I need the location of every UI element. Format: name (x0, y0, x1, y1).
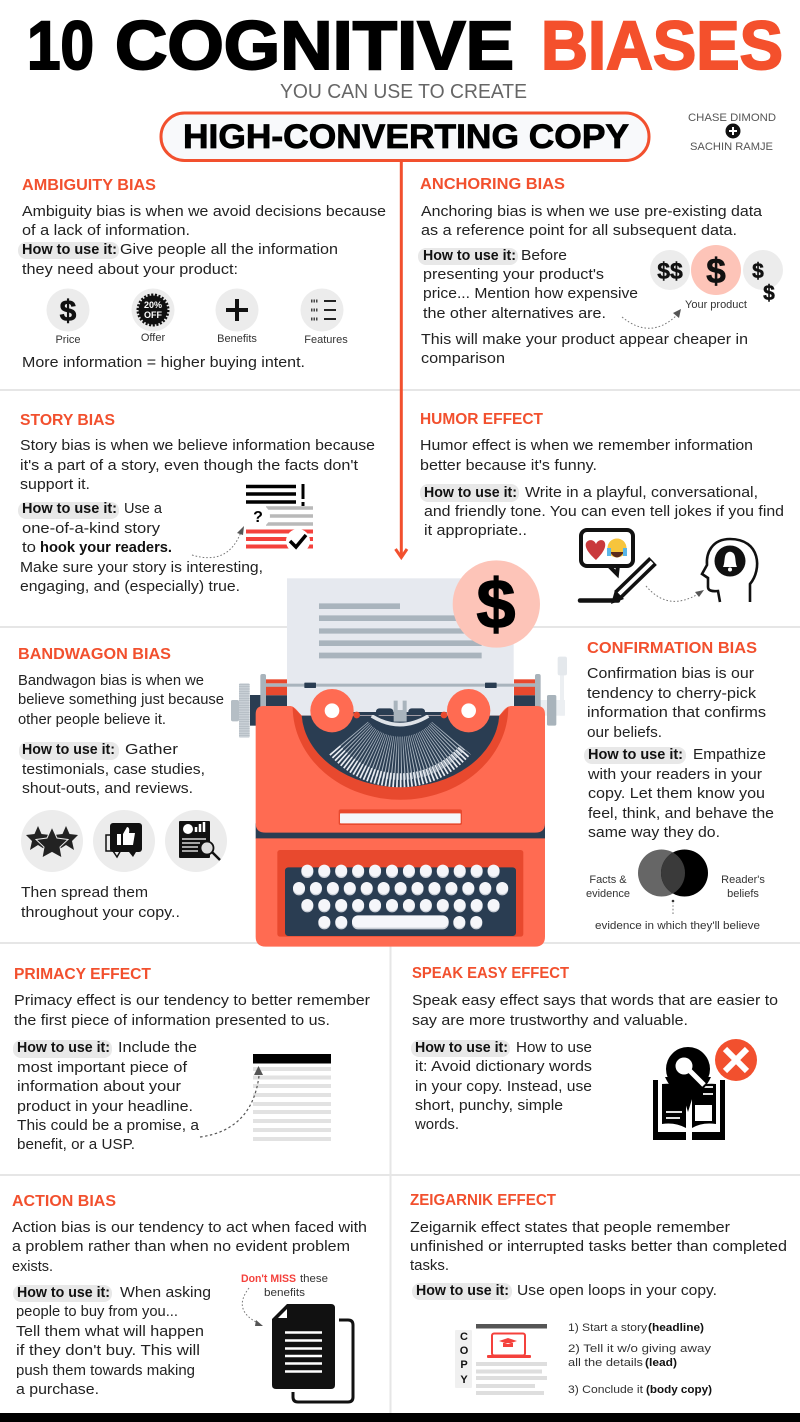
heading: action bias: ACTION BIAS (12, 1193, 116, 1210)
text: how to use action (13, 1285, 211, 1398)
panel: speak easy effect (411, 965, 778, 1140)
keyboard keys (299, 871, 502, 929)
icon: benefits (216, 288, 258, 345)
icon: offer (132, 288, 174, 344)
text: action definition: Action bias is our tendency to act when faced with (12, 1220, 367, 1236)
text: confirmation definition: Confirmation bias is our (587, 666, 754, 682)
text: story definition: it's a part of a story, even though the facts don't (20, 458, 358, 474)
text: how to use anchoring (418, 248, 638, 322)
text: how to use anchoring: the other alternatives are. (423, 306, 606, 322)
heading: bandwagon bias: BANDWAGON BIAS (18, 646, 171, 663)
text: anchoring conclusion: This will make your product appear cheaper in (421, 332, 748, 348)
text: how to use story: hook your readers. (40, 540, 172, 556)
icon: dictionary with magnifier (653, 1046, 725, 1140)
icon: price comparison circles: $$ (657, 258, 683, 284)
icon: price comparison circles: $ (706, 252, 726, 291)
text: how to use zeigarnik: How to use it: (416, 1283, 509, 1299)
text: ambiguity definition: of a lack of information. (22, 223, 190, 239)
text: zeigarnik steps: (headline) (648, 1322, 704, 1334)
text: how to use bandwagon: How to use it: (22, 742, 115, 758)
text: zeigarnik definition: tasks. (410, 1258, 449, 1274)
paper rod (263, 683, 538, 688)
icon: story document (246, 484, 313, 553)
panel: action bias (12, 1193, 367, 1402)
type bars fan (335, 716, 465, 780)
text: don't miss callout (241, 1273, 328, 1299)
dollar circle (453, 560, 540, 648)
text: how to use action: if they don't buy. This will (16, 1343, 200, 1359)
subtitle: YOU CAN USE TO CREATE (280, 80, 527, 103)
text: how to use zeigarnik: Use open loops in your copy. (517, 1283, 717, 1299)
text: zeigarnik steps (568, 1322, 712, 1396)
headline pill: HIGH-CONVERTING COPY (183, 118, 629, 156)
text: how to use ambiguity: How to use it: (22, 242, 117, 258)
text: how to use humor: Write in a playful, conversational, (525, 485, 758, 501)
icon: price comparison circles: Your product (685, 299, 747, 311)
text: how to use story: one-of-a-kind story (22, 521, 161, 537)
text: how to use speak easy: it: Avoid dictionary words (415, 1059, 592, 1075)
icon: stars (21, 810, 83, 872)
text: action definition (12, 1220, 367, 1275)
text: how to use primacy (13, 1040, 200, 1153)
text: primacy definition: the first piece of information presented to us. (14, 1013, 330, 1029)
panel: story bias (18, 412, 375, 595)
text: how to use action: people to buy from you... (16, 1304, 178, 1320)
icon: price: $ (60, 295, 77, 328)
text: anchoring definition (421, 204, 763, 239)
typewriter upper body (256, 706, 545, 833)
text: how to use primacy: product in your headline. (17, 1099, 193, 1115)
text: how to use ambiguity: Give people all the information (120, 242, 338, 258)
heading: primacy effect: PRIMACY EFFECT (14, 966, 151, 983)
text: how to use humor (420, 484, 784, 539)
venn diagram: beliefs (727, 888, 759, 900)
text: how to use story (18, 501, 263, 595)
icon: speech bubble with emoji and pencil (580, 530, 653, 604)
icon: report with magnifier (165, 810, 227, 872)
text: confirmation definition: tendency to cherry-pick (587, 686, 757, 702)
text: how to use action: How to use it: (17, 1285, 110, 1301)
text: primacy definition (14, 993, 370, 1029)
text: bandwagon definition: Bandwagon bias is when we (18, 673, 204, 689)
text: speak easy definition (412, 993, 778, 1029)
text: confirmation definition: our beliefs. (587, 725, 662, 741)
text: bandwagon definition: believe something just because (18, 692, 224, 708)
typebar guide and spools (310, 689, 490, 732)
title: 10 (27, 7, 94, 84)
icon: thumbs up reviews (93, 810, 155, 872)
panel: anchoring bias (418, 176, 783, 367)
text: confirmation definition: information that confirms (587, 705, 766, 721)
text: how to use story: Use a (124, 501, 163, 517)
text: how to use confirmation: same way they do. (588, 825, 720, 841)
text: how to use action: Tell them what will happen (16, 1324, 204, 1340)
icon: copy layout: Y (460, 1374, 468, 1386)
text: how to use zeigarnik (412, 1283, 717, 1300)
text: how to use speak easy: How to use (516, 1040, 592, 1056)
text: how to use story: How to use it: (22, 501, 117, 517)
text: action definition: a problem rather than when no evident problem (12, 1239, 350, 1255)
text: confirmation definition (587, 666, 766, 741)
title: BIASES (541, 7, 783, 84)
text: how to use confirmation: Empathize (693, 747, 766, 763)
text: speak easy definition: Speak easy effect says that words that are easier to (412, 993, 778, 1009)
icon: price (46, 288, 90, 346)
arrow: to documents (242, 1288, 263, 1326)
typewriter base (256, 823, 545, 947)
panel: zeigarnik effect (410, 1192, 787, 1396)
icon: headline document (253, 1054, 331, 1139)
illustration: typewriter (231, 560, 567, 947)
text: action definition: exists. (12, 1259, 53, 1275)
text: how to use speak easy: words. (414, 1117, 459, 1133)
text: how to use anchoring: Before (521, 248, 567, 264)
text: how to use primacy: most important piece of (17, 1060, 188, 1076)
text: ambiguity definition: Ambiguity bias is when we avoid decisions because (22, 204, 386, 220)
text: anchoring conclusion: comparison (421, 351, 505, 367)
typewriter left side (231, 674, 287, 738)
text: how to use speak easy (411, 1040, 592, 1133)
icon: offer: Offer (141, 332, 165, 344)
text: how to use confirmation: copy. Let them know you (588, 786, 765, 802)
arrow: to your product (622, 309, 681, 328)
icon: offer: 20% (144, 300, 162, 310)
text: how to use primacy: How to use it: (17, 1040, 110, 1056)
text: bandwagon conclusion (21, 885, 180, 921)
text: how to use confirmation: How to use it: (588, 747, 683, 763)
paper slot (339, 809, 462, 825)
text: bandwagon conclusion: throughout your copy.. (21, 905, 180, 921)
text: story definition: support it. (20, 477, 90, 493)
heading: anchoring bias: ANCHORING BIAS (420, 176, 565, 193)
text: how to use story: to (22, 540, 36, 556)
heading: zeigarnik effect: ZEIGARNIK EFFECT (410, 1192, 556, 1209)
text: how to use primacy: benefit, or a USP. (17, 1137, 135, 1153)
text: how to use action: push them towards making (16, 1363, 195, 1379)
icon: price comparison circles (650, 245, 783, 311)
text: how to use confirmation (584, 747, 774, 841)
text: ambiguity definition (22, 204, 386, 239)
icon: price comparison circles: $ (763, 282, 775, 305)
icon: copy layout (455, 1324, 547, 1393)
text: zeigarnik steps: all the details (568, 1357, 644, 1369)
text: humor definition (420, 438, 753, 474)
text: how to use primacy: This could be a promise, a (17, 1118, 200, 1134)
text: how to use action: a purchase. (16, 1382, 99, 1398)
text: ambiguity conclusion: More information = higher buying intent. (22, 355, 305, 371)
icon: features: Features (304, 334, 348, 346)
text: how to use ambiguity (18, 242, 338, 278)
icon: red cross (715, 1039, 757, 1081)
text: bandwagon conclusion: Then spread them (21, 885, 148, 901)
text: anchoring definition: Anchoring bias is when we use pre-existing data (421, 204, 763, 220)
text: story definition: Story bias is when we believe information because (20, 438, 375, 454)
text: zeigarnik steps: 3) Conclude it (568, 1384, 643, 1396)
icon: features (300, 288, 348, 346)
typewriter right side (514, 657, 567, 726)
icon: benefits: Benefits (217, 333, 257, 345)
text: anchoring definition: as a reference point for all subsequent data. (421, 223, 737, 239)
heading: humor effect: HUMOR EFFECT (420, 411, 543, 428)
panel: primacy effect (13, 966, 370, 1153)
text: how to use primacy: information about your (17, 1079, 181, 1095)
text: how to use story: engaging, and (especially) true. (20, 579, 240, 595)
panel: humor effect (420, 411, 784, 604)
text: zeigarnik definition (410, 1220, 787, 1274)
text: how to use bandwagon (19, 742, 205, 797)
text: how to use bandwagon: shout-outs, and reviews. (22, 781, 193, 797)
text: don't miss callout: benefits (264, 1287, 306, 1299)
text: how to use bandwagon: Gather (125, 742, 178, 758)
panel: bandwagon bias (18, 646, 227, 921)
heading: ambiguity bias: AMBIGUITY BIAS (22, 177, 156, 194)
authors: SACHIN RAMJE (690, 141, 773, 153)
text: how to use confirmation: with your readers in your (587, 767, 762, 783)
text: don't miss callout: these (300, 1273, 328, 1285)
text: zeigarnik steps: 1) Start a story (568, 1322, 648, 1334)
panel: ambiguity bias (18, 177, 386, 371)
icon: copy layout: P (460, 1359, 468, 1371)
panel: confirmation bias (584, 640, 774, 932)
text: primacy definition: Primacy effect is our tendency to better remember (14, 993, 370, 1009)
heading: speak easy effect: SPEAK EASY EFFECT (412, 965, 569, 982)
arrow: to story document (192, 526, 244, 558)
text: zeigarnik steps: (lead) (645, 1357, 677, 1369)
text: how to use anchoring: price... Mention how expensive (423, 286, 638, 302)
arrow: from headline pill to typewriter (396, 160, 407, 558)
icon: price: Price (55, 334, 81, 346)
venn diagram (586, 850, 765, 932)
text: story definition (20, 438, 375, 493)
icon: price comparison circles: $ (752, 260, 764, 283)
text: zeigarnik definition: unfinished or interrupted tasks better than completed (410, 1239, 787, 1255)
icon: head with bell (702, 539, 757, 602)
text: how to use humor: How to use it: (424, 485, 517, 501)
icon: copy layout: C (460, 1331, 468, 1343)
text: how to use humor: and friendly tone. You can even tell jokes if you find (424, 504, 784, 520)
text: how to use anchoring: How to use it: (423, 248, 516, 264)
text: zeigarnik steps: 2) Tell it w/o giving away (568, 1343, 712, 1355)
text: bandwagon definition: other people believe it. (18, 712, 166, 728)
text: how to use speak easy: How to use it: (415, 1040, 508, 1056)
venn diagram: Facts & (589, 874, 627, 886)
text: zeigarnik steps: (body copy) (646, 1384, 712, 1396)
venn diagram: evidence in which they'll believe (595, 920, 760, 932)
title: COGNITIVE (115, 7, 514, 84)
text: don't miss callout: Don't MISS (241, 1273, 296, 1285)
arrow: to headline (200, 1066, 263, 1137)
venn diagram: Reader's (721, 874, 765, 886)
icon: story document: ? (253, 509, 263, 526)
authors (688, 112, 776, 153)
text: how to use speak easy: in your copy. Instead, use (415, 1079, 592, 1095)
icon: documents (272, 1304, 353, 1402)
paper (287, 578, 514, 718)
arrow: to head (646, 586, 704, 601)
authors: CHASE DIMOND (688, 112, 776, 124)
text: how to use action: When asking (120, 1285, 211, 1301)
text: anchoring conclusion (421, 332, 748, 367)
text: how to use confirmation: feel, think, and behave the (588, 806, 774, 822)
icon: copy layout: O (460, 1345, 469, 1357)
text: how to use humor: it appropriate.. (424, 523, 527, 539)
text: how to use story: Make sure your story is interesting, (20, 560, 263, 576)
icon: offer: OFF (144, 310, 162, 320)
venn diagram: evidence (586, 888, 630, 900)
title (27, 7, 783, 84)
text: how to use anchoring: presenting your product's (423, 267, 604, 283)
icon: dollar sign: $ (477, 565, 515, 643)
text: humor definition: Humor effect is when we remember information (420, 438, 753, 454)
text: speak easy definition: say are more trustworthy and valuable. (412, 1013, 688, 1029)
text: how to use primacy: Include the (118, 1040, 197, 1056)
text: humor definition: better because it's funny. (420, 458, 597, 474)
heading: story bias: STORY BIAS (20, 412, 115, 429)
text: how to use ambiguity: they need about your product: (22, 262, 238, 278)
text: bandwagon definition (18, 673, 224, 728)
text: how to use bandwagon: testimonials, case studies, (22, 762, 205, 778)
heading: confirmation bias: CONFIRMATION BIAS (587, 640, 757, 657)
text: zeigarnik definition: Zeigarnik effect states that people remember (410, 1220, 730, 1236)
text: how to use speak easy: short, punchy, simple (415, 1098, 563, 1114)
